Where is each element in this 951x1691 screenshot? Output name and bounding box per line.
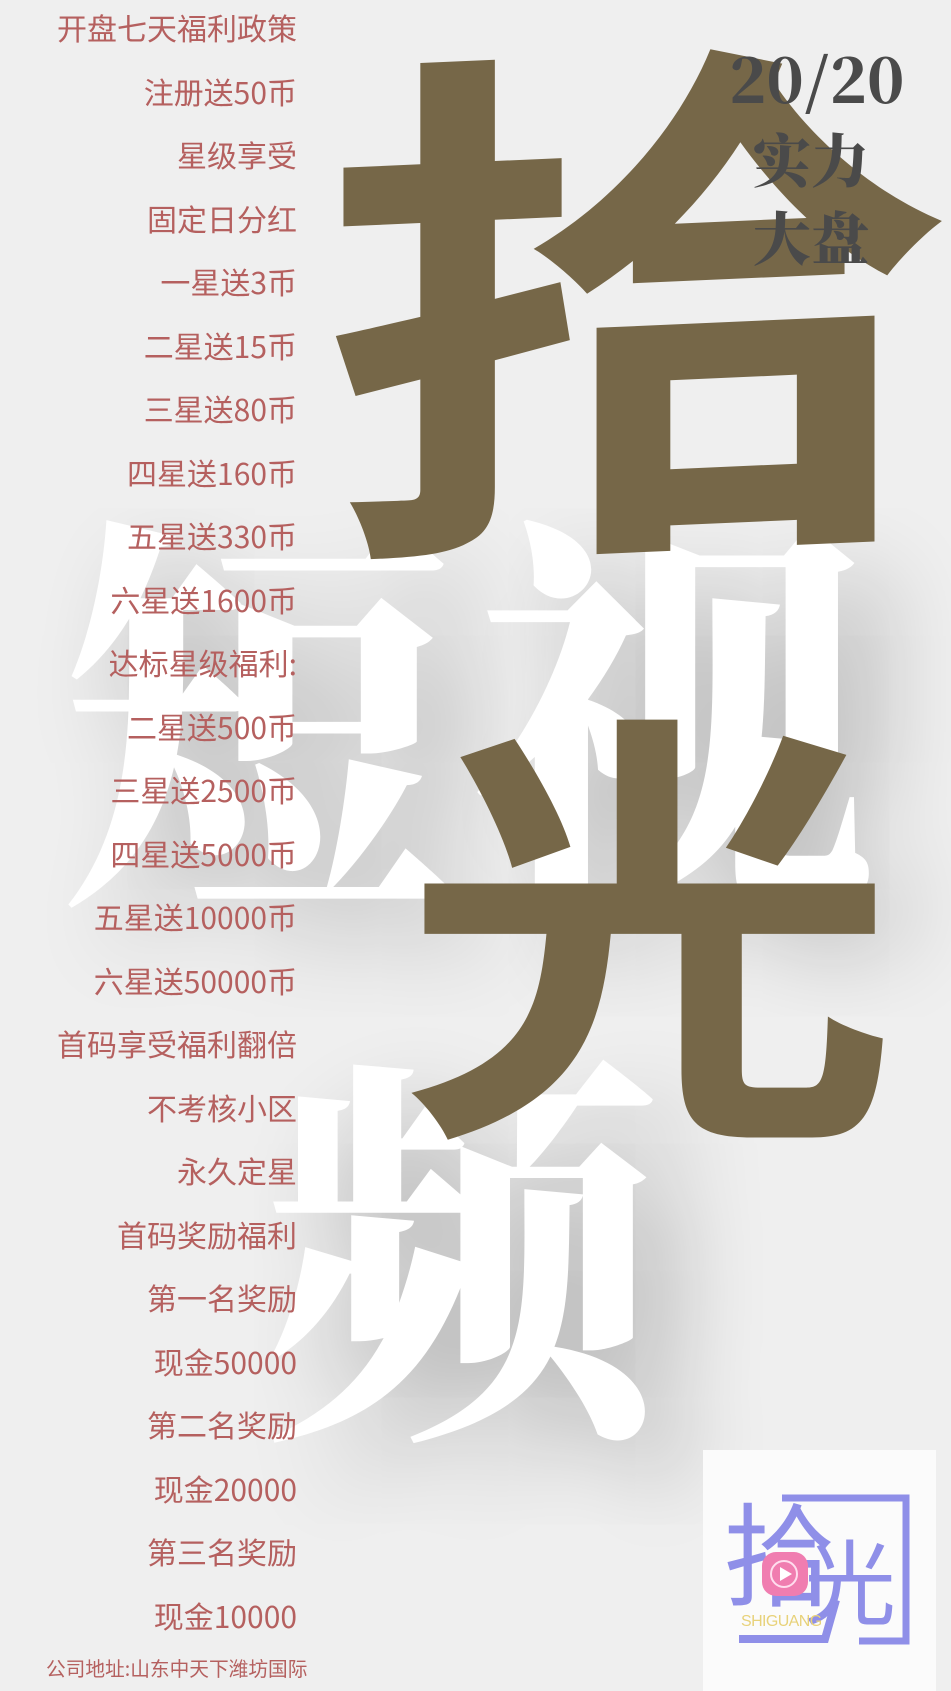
list item: 首码享受福利翻倍 <box>57 1021 297 1065</box>
list item: 现金10000 <box>154 1592 297 1636</box>
list item: 第二名奖励 <box>147 1402 297 1446</box>
list item: 四星送5000币 <box>110 830 297 874</box>
list item: 首码奖励福利 <box>117 1212 297 1256</box>
big white character: 频: 频 <box>264 1048 664 1491</box>
list item: 四星送160币 <box>127 450 297 494</box>
list item: 永久定星 <box>177 1148 297 1192</box>
subtitle line two: 大盘 <box>753 193 869 277</box>
brush character: 光: 光 <box>400 695 898 1194</box>
subtitle line one: 实力 <box>753 115 869 199</box>
logo caption: SHIGUANG <box>741 1613 822 1630</box>
list item: 注册送50币 <box>144 68 297 112</box>
logo play icon <box>762 1552 808 1596</box>
list item: 三星送80币 <box>144 386 297 430</box>
list item: 第一名奖励 <box>147 1275 297 1319</box>
list item: 达标星级福利: <box>109 640 297 684</box>
welfare policy list <box>57 5 297 1636</box>
list item: 现金50000 <box>154 1338 297 1382</box>
brush character: 拾: 拾 <box>318 11 951 631</box>
list item: 一星送3币 <box>160 259 297 303</box>
list item: 第三名奖励 <box>147 1529 297 1573</box>
year number: 20/20 <box>729 34 904 121</box>
list item: 五星送10000币 <box>94 894 297 938</box>
list item: 二星送500币 <box>127 704 297 748</box>
list item: 开盘七天福利政策 <box>57 5 297 49</box>
big white character: 短: 短 <box>58 505 458 966</box>
list item: 六星送1600币 <box>110 576 297 620</box>
company address: 公司地址:山东中天下潍坊国际 <box>46 1653 307 1682</box>
logo panel <box>703 1450 936 1691</box>
list item: 五星送330币 <box>127 513 297 557</box>
heading: 20/20 实力大盘 <box>729 34 904 277</box>
list item: 二星送15币 <box>144 322 297 366</box>
list item: 不考核小区 <box>147 1084 297 1128</box>
big white character: 视: 视 <box>474 505 874 966</box>
list item: 六星送50000币 <box>94 958 297 1002</box>
list item: 星级享受 <box>177 132 297 176</box>
list item: 固定日分红 <box>147 196 297 240</box>
logo wordmark: 拾: 拾 <box>723 1468 835 1630</box>
list item: 三星送2500币 <box>110 767 297 811</box>
logo frame lines <box>739 1494 910 1644</box>
logo wordmark: 光: 光 <box>804 1511 896 1644</box>
list item: 现金20000 <box>154 1466 297 1510</box>
